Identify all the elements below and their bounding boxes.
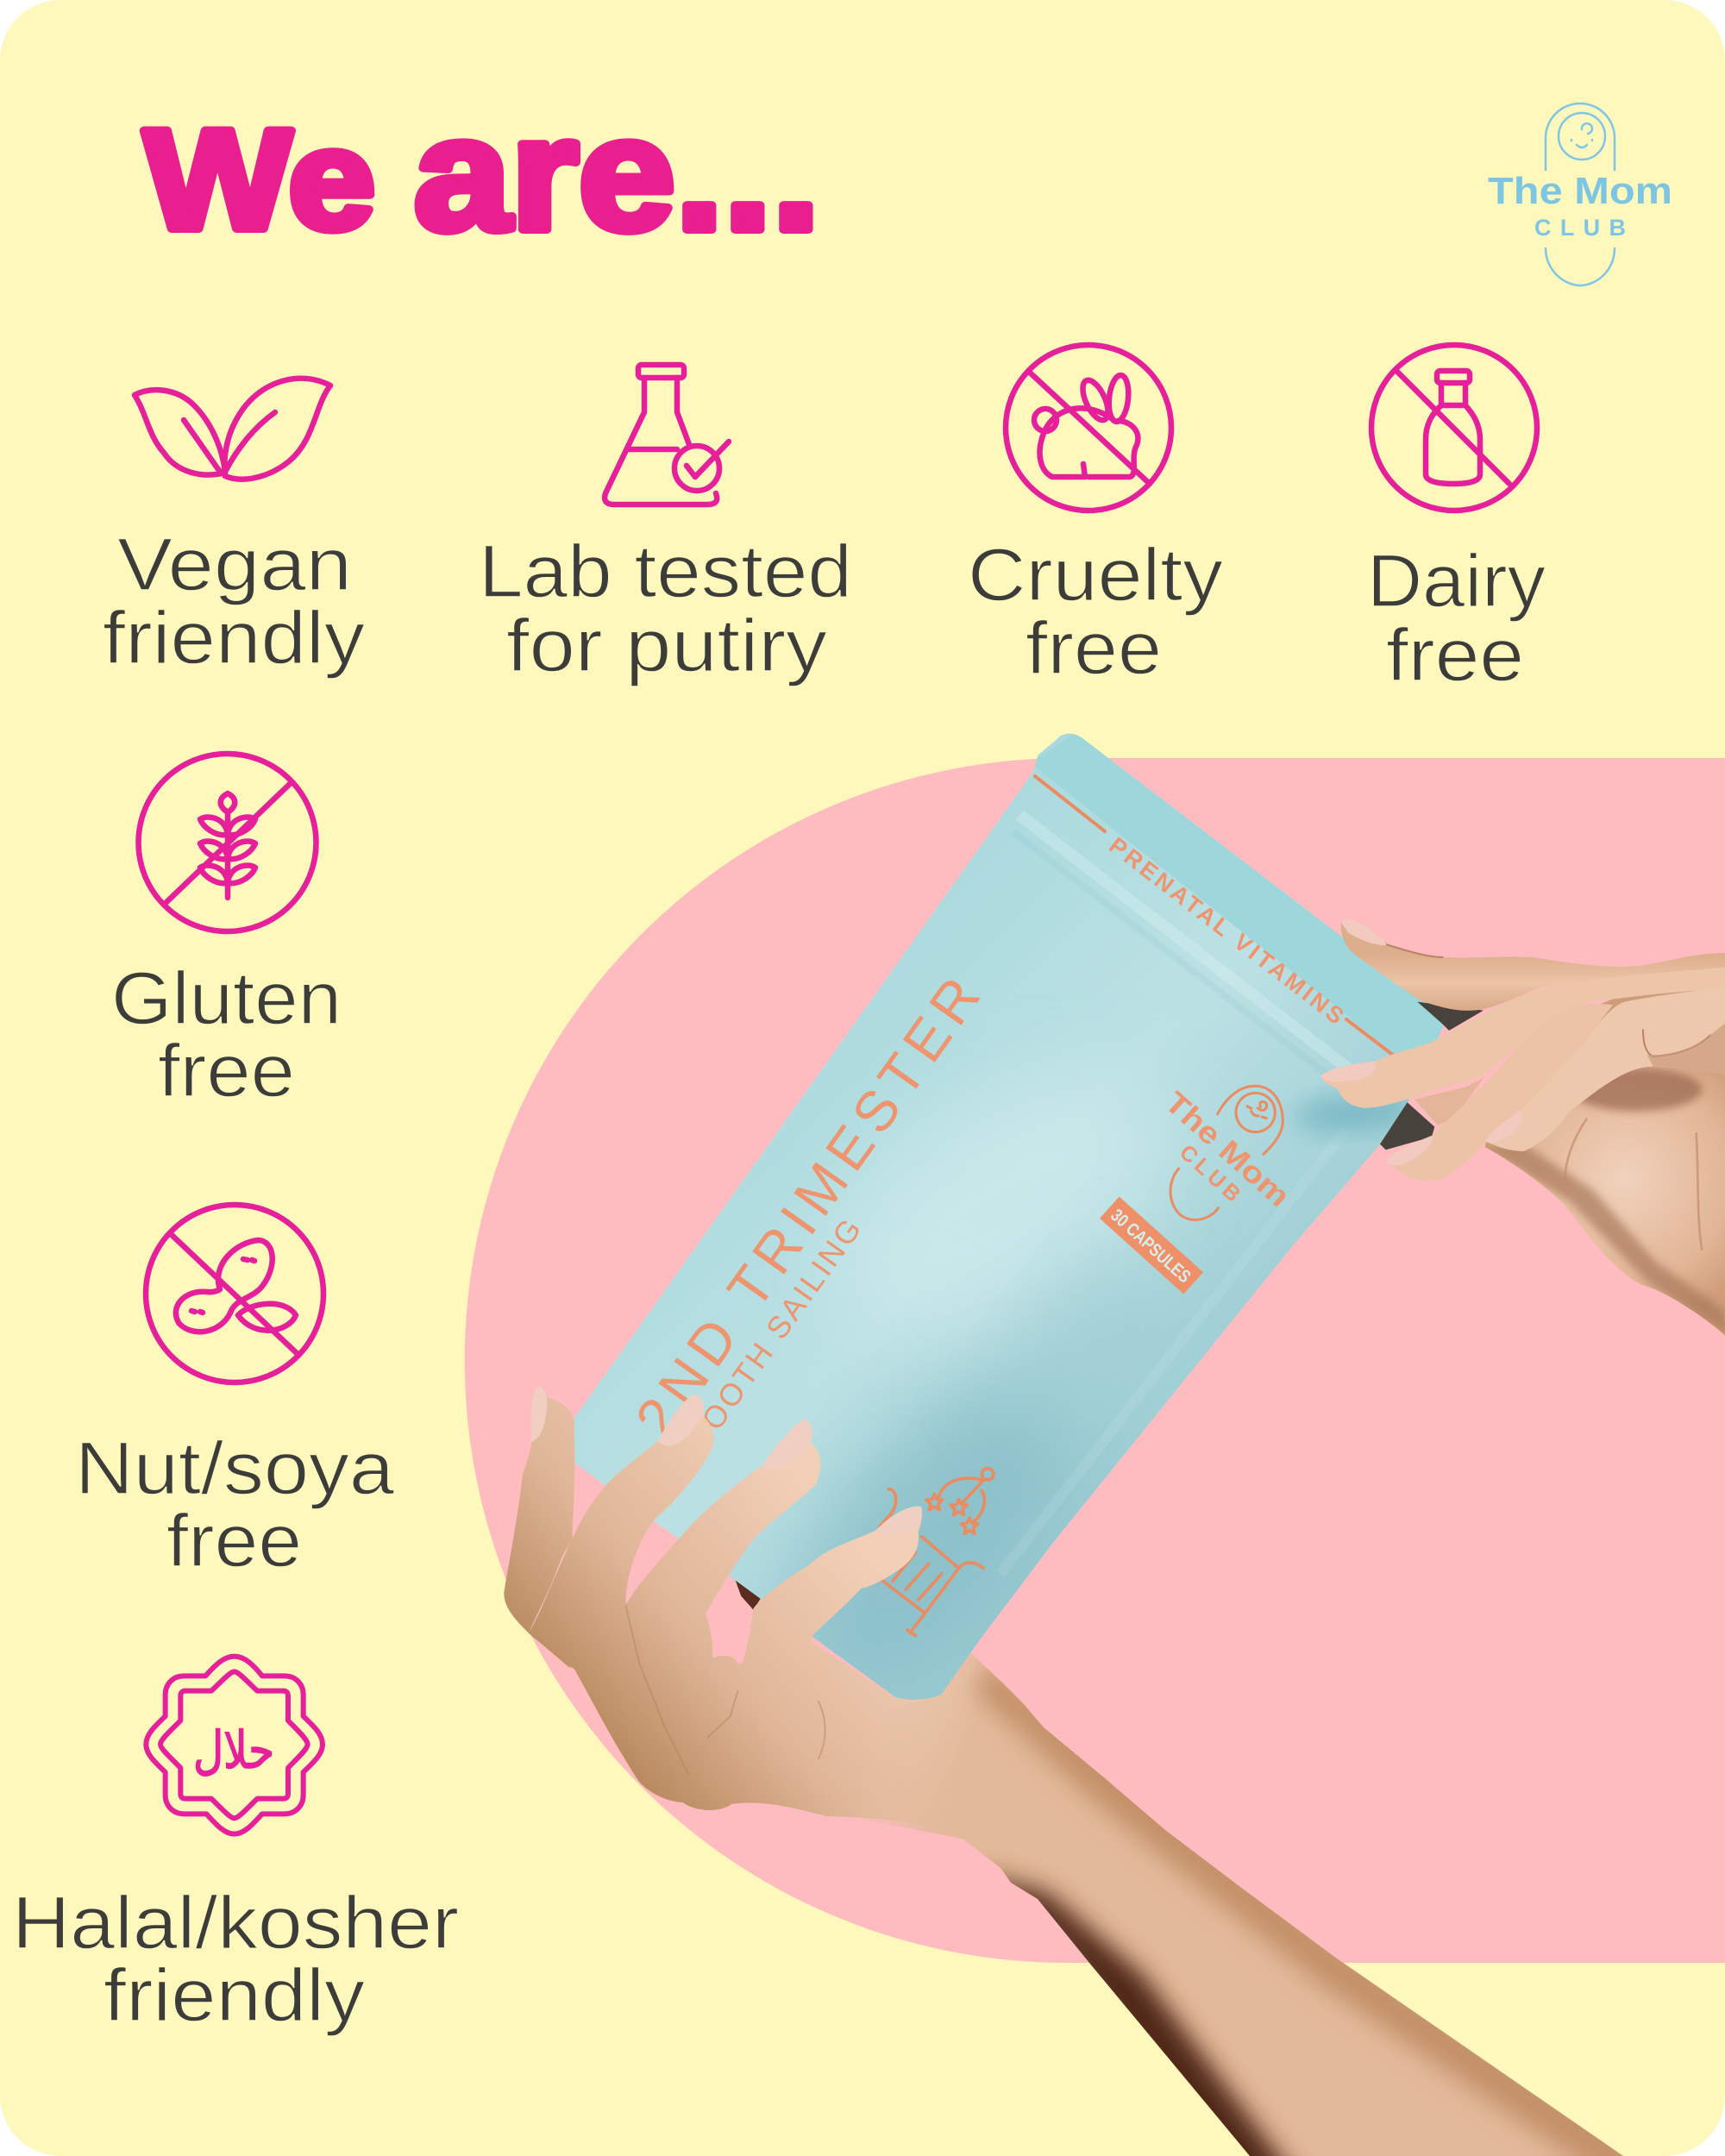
logo: The Mom Club: CLUB: [1534, 215, 1626, 241]
nails: [1321, 919, 1522, 1166]
item: gluten free: Gluten: [111, 957, 342, 1040]
product pouch: [572, 724, 1466, 1750]
finger: middle: [1485, 987, 1725, 1151]
item: lab tested: Lab tested: [479, 530, 852, 613]
finger: ring: [1385, 1004, 1613, 1181]
title: [144, 84, 820, 264]
lower hand palm: [529, 1579, 975, 1839]
item: cruelty free: free: [1026, 607, 1162, 690]
lower hand fingers: [504, 1387, 922, 1775]
upper right hand: [1321, 919, 1725, 1337]
logo: The Mom Club: The Mom: [1488, 170, 1672, 212]
finger: behind index: [1414, 1078, 1484, 1125]
icon: crossed milk bottle: [1371, 345, 1537, 511]
item: nut soya free: [75, 1205, 394, 1583]
palm: [1485, 953, 1725, 1335]
pouch subtitle: SMOOTH SAILING: [664, 1213, 868, 1479]
item: halal kosher friendly: [12, 1657, 459, 2037]
creases: [625, 1605, 825, 1775]
item: cruelty free: [968, 345, 1223, 690]
item: dairy free: Dairy: [1367, 540, 1546, 623]
icon: crossed rabbit: [1006, 345, 1171, 511]
title: We: [144, 100, 375, 259]
seal strip text: [1035, 776, 1394, 1056]
item: dairy free: [1367, 345, 1546, 697]
item: halal kosher friendly: friendly: [104, 1954, 365, 2037]
icon: halal seal: [146, 1657, 323, 1834]
icon: crossed peanut: [146, 1205, 323, 1382]
item: gluten free: free: [158, 1030, 295, 1112]
item: nut soya free: Nut/soya: [75, 1427, 394, 1510]
forearm: [862, 1652, 1639, 2156]
icon: flask with check: [605, 365, 729, 505]
shadow behind fingers: [1380, 1002, 1636, 1150]
thumb: [732, 1507, 922, 1771]
item: lab tested: [479, 365, 852, 687]
item: lab tested: for putiry: [506, 605, 827, 687]
panel: pink rounded backdrop: [465, 758, 1725, 1963]
shadow behind thumb: [735, 1579, 761, 1610]
pouch title: 2ND TRIMESTER: [623, 966, 992, 1449]
pouch logo: The Mom: [1158, 1086, 1296, 1213]
finger: index: [1321, 968, 1725, 1108]
item: cruelty free: Cruelty: [968, 534, 1223, 617]
pouch logo: CLUB: [1175, 1140, 1245, 1206]
icon: crib and mobile: [880, 1469, 994, 1636]
item: vegan friendly: [103, 379, 365, 680]
item: nut soya free: free: [166, 1500, 302, 1583]
item: vegan friendly: Vegan: [117, 523, 352, 606]
item: vegan friendly: friendly: [103, 597, 365, 680]
icon: halal seal: حلال: [193, 1720, 274, 1781]
icon: leaves: [135, 379, 330, 479]
logo: The Mom Club: [1488, 103, 1672, 285]
item: halal kosher friendly: Halal/kosher: [12, 1882, 459, 1965]
title: are...: [414, 84, 820, 264]
finger 1: [504, 1387, 574, 1633]
seal strip text: PRENATAL VITAMINS: [1104, 832, 1349, 1030]
item: dairy free: free: [1386, 614, 1524, 697]
icon: crossed wheat: [138, 754, 316, 931]
finger 3: [625, 1419, 820, 1771]
capsule badge: 30 CAPSULES: [1107, 1206, 1195, 1287]
finger 2: [529, 1395, 713, 1679]
item: gluten free: [111, 754, 342, 1112]
nails: [530, 1387, 922, 1534]
finger: top: [1341, 920, 1725, 1011]
